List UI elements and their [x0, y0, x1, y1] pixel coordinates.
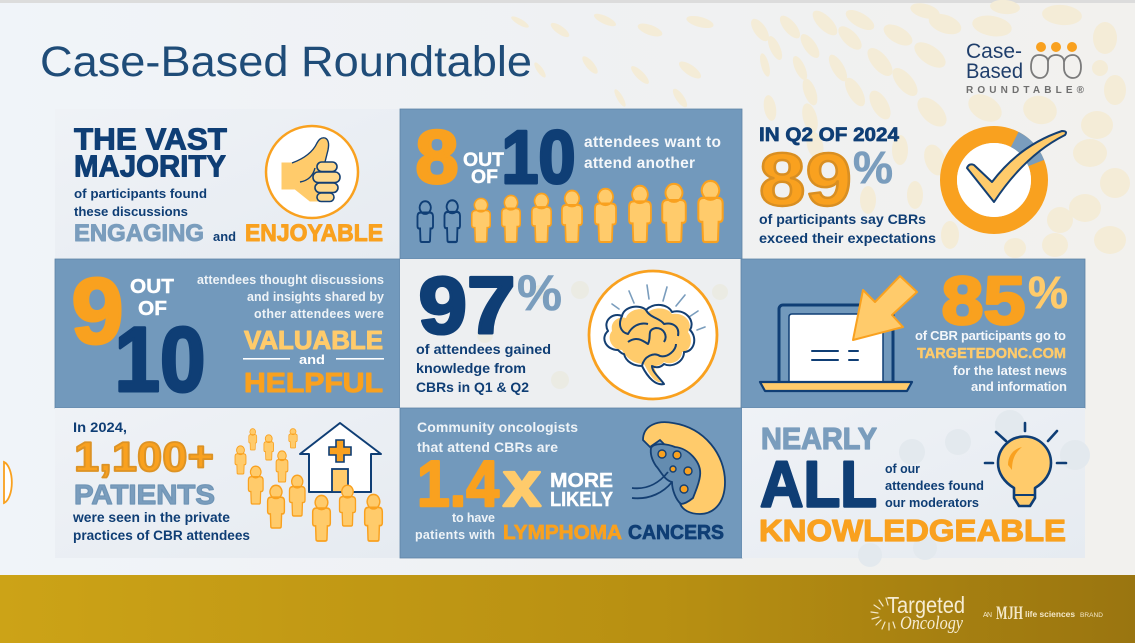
text: participants go to targetedonc.com: for the latest news [953, 363, 1067, 378]
title: Case-Based Roundtable [40, 38, 532, 86]
stat: 89 percent: % [853, 142, 893, 193]
text: all: ALL [760, 448, 877, 520]
text: engaging and enjoyable: ENJOYABLE [245, 220, 383, 247]
panel: 85 percent [741, 259, 1085, 408]
text: exceed expectations [759, 211, 936, 246]
text: valuable and helpful: HELPFUL [244, 367, 383, 398]
text: of our attendees found our moderators [885, 462, 984, 510]
panel: 97 percent [400, 259, 741, 408]
text: in 2024: In 2024, [73, 419, 127, 435]
stat: 1.4x more likely: 1.4 [417, 447, 499, 520]
text: to have patients with lymphoma cancers: to have [452, 511, 495, 525]
text: to have patients with lymphoma cancers: CANCERS [628, 522, 724, 544]
text: community oncologists [417, 419, 578, 455]
text: valuable and helpful: VALUABLE [244, 325, 383, 355]
text: engaging and enjoyable: ENGAGING [74, 220, 204, 247]
stat: 8 out of 10: OF [471, 167, 498, 188]
text: of our attendees found our moderators: attendees found [885, 479, 984, 493]
panel: 8 out of 10 [400, 109, 742, 259]
stat: 9 out of 10: OF [138, 297, 167, 320]
text: attendees want to attend another: attendees want to [584, 134, 721, 151]
logo: MJH life sciences brand [983, 603, 1103, 624]
text: seen in private practices [72, 510, 250, 543]
logo: MJH life sciences brand: BRAND [1080, 612, 1103, 619]
logo: case-based roundtable: ROUNDTABLE® [966, 85, 1085, 96]
logo: MJH life sciences brand: AN [983, 612, 992, 619]
panel: nearly all knowledgeable [742, 408, 1090, 567]
text: participants found [74, 186, 207, 219]
stat: 8 out of 10: OUT [463, 150, 504, 171]
pictogram: eight of ten people [417, 181, 723, 242]
text: participants go to targetedonc.com: TARGETEDONC.COM [917, 345, 1066, 362]
stat: 1.4x more likely: LIKELY [550, 489, 614, 511]
stat: 85 percent [942, 263, 1068, 339]
panel: 1.4x more likely [400, 408, 742, 558]
text: exceed expectations: of participants say CBRs [759, 211, 926, 227]
text: attendees thought discussions: and insights shared by [247, 290, 384, 304]
icon: laptop with arrow [760, 276, 917, 391]
stat: 9 out of 10 [72, 259, 206, 411]
text: attendees want to attend another: attend another [584, 155, 695, 172]
icon: donut with check mark [948, 131, 1066, 226]
logo: MJH life sciences brand: life sciences [1025, 609, 1075, 619]
stat: 89 percent [759, 138, 893, 222]
heading: the vast majority: MAJORITY [74, 148, 226, 184]
stat: 85 percent: 85 [942, 263, 1026, 339]
logo: case-based roundtable: Case- [966, 40, 1022, 63]
text: engaging and enjoyable: and [213, 229, 236, 244]
logo: targeted oncology: Targeted [887, 592, 965, 618]
text: attendees thought discussions [197, 273, 384, 321]
icon: kidney lymph node [632, 422, 725, 514]
text: knowledgeable: KNOWLEDGEABLE [759, 513, 1066, 548]
text: participants go to targetedonc.com: of CBR participants go to [915, 328, 1066, 343]
stat: 8 out of 10: 8 [416, 115, 458, 199]
stat: 97 percent: % [517, 265, 562, 321]
icon: light bulb [985, 423, 1066, 506]
text: of our attendees found our moderators: our moderators [885, 496, 979, 510]
text: valuable and helpful [243, 325, 384, 398]
stat: 89 percent: 89 [759, 138, 852, 222]
icon: thumbs up [266, 126, 358, 218]
text: attendees want to attend another [584, 134, 721, 172]
text: attendees thought discussions: attendees thought discussions [197, 273, 384, 287]
text: to have patients with lymphoma cancers [415, 511, 724, 544]
text: gained knowledge: knowledge from [416, 360, 526, 376]
panel: 89 percent [759, 125, 1066, 246]
text: of our attendees found our moderators: of our [885, 462, 920, 476]
pictogram: patients [235, 429, 382, 541]
stat: 9 out of 10: 9 [72, 259, 124, 363]
icon: brain [589, 271, 717, 399]
text: to have patients with lymphoma cancers: LYMPHOMA [503, 522, 622, 544]
stat: 97 percent [418, 261, 562, 351]
stat: 1,100+: 1,100+ [74, 433, 214, 480]
text: participants go to targetedonc.com [915, 328, 1067, 394]
text: valuable and helpful: and [299, 352, 325, 367]
heading: in Q2 of 2024: IN Q2 OF 2024 [759, 125, 899, 146]
text: nearly: NEARLY [761, 421, 877, 456]
stat: 8 out of 10 [416, 115, 576, 199]
text: community oncologists: that attend CBRs are [417, 439, 558, 455]
stat: 9 out of 10: OUT [130, 275, 174, 298]
text: seen in private practices: were seen in the private [72, 510, 231, 525]
text: to have patients with lymphoma cancers: patients with [415, 528, 495, 542]
text: gained knowledge: CBRs in Q1 & Q2 [416, 379, 529, 395]
stat: 9 out of 10: 10 [114, 309, 206, 411]
text: exceed expectations: exceed their expectations [759, 230, 936, 246]
stat: 1.4x more likely: x [503, 448, 541, 520]
stat: 85 percent: % [1028, 267, 1068, 318]
stat: 8 out of 10: 10 [502, 115, 576, 199]
panel: engaging and enjoyable [55, 109, 401, 259]
text: community oncologists: Community oncologists [417, 419, 578, 435]
text: participants found: of participants found [74, 186, 207, 201]
text: engaging and enjoyable [74, 220, 383, 247]
text: patients: PATIENTS [74, 479, 215, 510]
icon: clinic building [300, 423, 381, 492]
footer band [0, 575, 1135, 643]
stat: 97 percent: 97 [418, 261, 516, 351]
heading: the vast majority [74, 122, 227, 184]
text: gained knowledge [416, 341, 551, 395]
text: gained knowledge: of attendees gained [416, 341, 551, 357]
logo: case-based roundtable [966, 40, 1085, 96]
heading: the vast majority: THE VAST [74, 122, 227, 156]
icon: clipped circle at left edge [4, 462, 12, 503]
logo: MJH life sciences brand: MJH [996, 603, 1023, 624]
text: participants found: these discussions [74, 204, 188, 219]
text: attendees thought discussions: other attendees were [254, 307, 384, 321]
stat: 1.4x more likely [417, 447, 614, 520]
logo: targeted oncology [871, 592, 965, 634]
text: participants go to targetedonc.com: and information [971, 379, 1067, 394]
panel: 1,100+ patients [55, 408, 400, 558]
logo: case-based roundtable: Based [966, 60, 1023, 83]
logo: targeted oncology: Oncology [900, 613, 963, 634]
text: seen in private practices: practices of CBR attendees [73, 528, 250, 543]
stat: 1.4x more likely: MORE [550, 470, 613, 492]
panel: 9 out of 10 [55, 259, 400, 411]
